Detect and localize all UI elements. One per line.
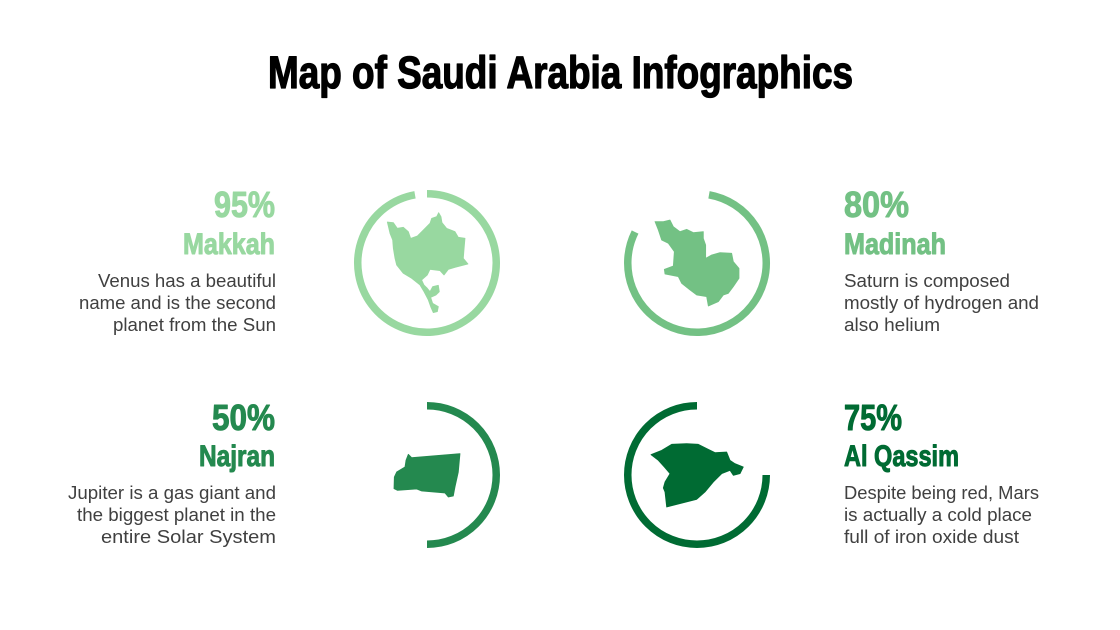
heading: Makkah: Makkah [183,228,275,261]
ring: Al Qassim 75% [628,406,766,544]
description: Madinah [844,271,1039,335]
percentage: 75%: 75% [844,397,902,438]
ring: Najran 50% [427,406,496,544]
title: Map of Saudi Arabia Infographics [268,47,853,98]
description: Najran: entire Solar System [101,527,276,547]
panel: Madinah text [844,184,1039,335]
description: Makkah [79,271,276,335]
ring: Makkah 95% [358,194,496,332]
map: Madinah [655,220,739,306]
description: Al Qassim: is actually a cold place [844,505,1032,525]
description: Madinah: mostly of hydrogen and [844,293,1039,313]
description: Najran: Jupiter is a gas giant and [68,483,276,503]
description: Makkah: name and is the second [79,293,276,313]
heading: Madinah: Madinah [844,228,946,261]
description: Madinah: also helium [844,315,940,335]
heading: Najran: Najran [199,440,275,473]
description: Najran [68,483,276,547]
description: Al Qassim [844,483,1039,547]
description: Al Qassim: full of iron oxide dust [844,527,1019,547]
percentage: 95%: 95% [214,184,275,225]
percentage: 50%: 50% [212,397,275,438]
map: Makkah [387,213,468,313]
percentage: 80%: 80% [844,184,909,225]
description: Al Qassim: Despite being red, Mars [844,483,1039,503]
panel: Najran text [68,397,276,547]
description: Madinah: Saturn is composed [844,271,1010,291]
description: Najran: the biggest planet in the [77,505,276,525]
description: Makkah: Venus has a beautiful [98,271,276,291]
panel: Makkah text [79,184,276,335]
description: Makkah: planet from the Sun [113,315,276,335]
panel: Al Qassim text [844,397,1039,547]
ring: Madinah 80% [628,195,766,332]
heading: Al Qassim: Al Qassim [844,440,959,473]
map: Najran [394,454,460,497]
map: Al Qassim [651,444,743,507]
